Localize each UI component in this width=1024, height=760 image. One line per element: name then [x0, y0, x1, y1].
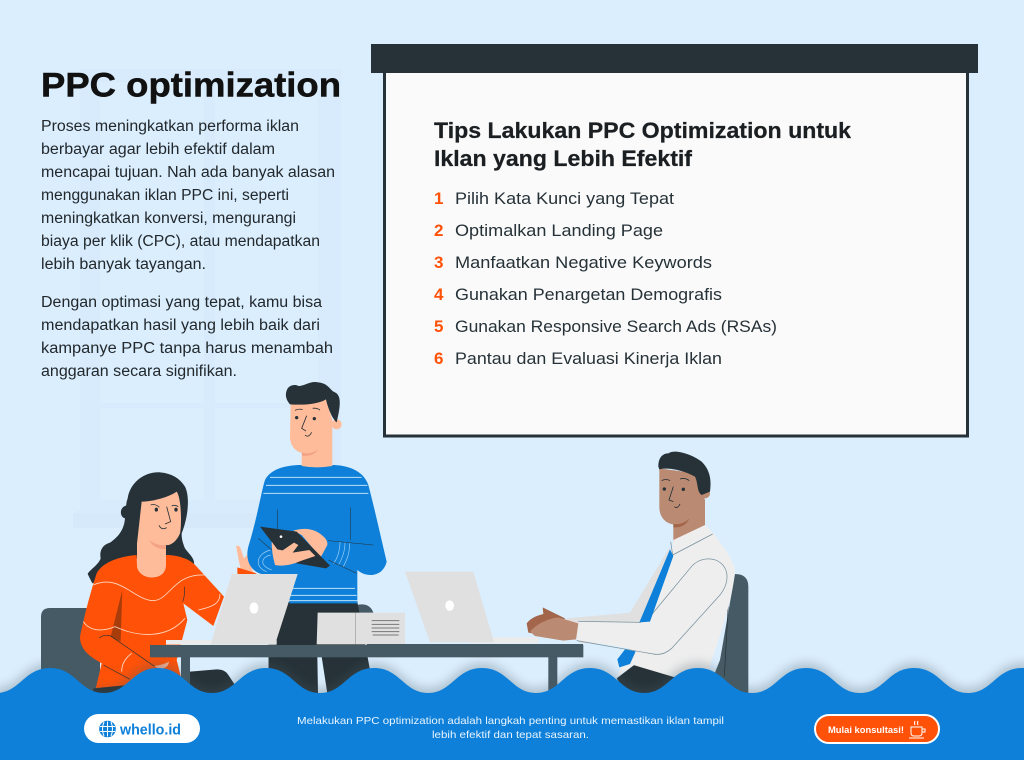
tip 4: Gunakan Penargetan Demografis — [455, 285, 722, 304]
head and neck — [290, 399, 332, 467]
woman hand on table — [154, 662, 169, 669]
intro paragraph: Proses meningkatkan performa iklan — [41, 118, 299, 135]
woman face and neck — [137, 492, 181, 577]
woman facial features — [151, 505, 178, 529]
logo text: whello.id — [119, 722, 181, 738]
second paragraph: Dengan optimasi yang tepat, kamu bisa — [41, 294, 322, 311]
tips heading: Tips Lakukan PPC Optimization untuk — [434, 118, 852, 143]
title: PPC optimization — [41, 66, 341, 104]
head and neck — [659, 468, 705, 542]
sleeve details — [258, 542, 349, 572]
intro paragraph: biaya per klik (CPC), atau mendapatkan — [41, 233, 320, 250]
second paragraph: mendapatkan hasil yang lebih baik dari — [41, 317, 320, 334]
tip 5: Gunakan Responsive Search Ads (RSAs) — [455, 317, 777, 336]
tip 5: 5 — [434, 317, 443, 336]
intro paragraph: meningkatkan konversi, mengurangi — [41, 210, 296, 227]
table leg — [548, 656, 557, 696]
icon: coffee cup — [909, 721, 925, 738]
footer wave band — [0, 668, 1024, 760]
woman trousers — [93, 669, 235, 698]
sweater stripes — [263, 477, 368, 601]
face features — [662, 478, 689, 508]
chair behind box — [350, 604, 374, 615]
hair — [88, 472, 194, 583]
consultation button — [815, 715, 939, 743]
screen sheet — [384, 70, 968, 436]
intro paragraph: lebih banyak tayangan. — [41, 256, 206, 273]
footer message: Melakukan PPC optimization adalah langkah penting untuk memastikan iklan tampil — [297, 715, 724, 727]
tablet — [260, 527, 330, 568]
panel: projector screen with tips — [371, 44, 978, 436]
tip 1: Pilih Kata Kunci yang Tepat — [455, 189, 674, 208]
illustration: seated man with laptop — [367, 452, 748, 696]
button label: Mulai konsultasi! — [828, 725, 904, 736]
icon: globe — [100, 722, 115, 736]
tip 6: 6 — [434, 349, 443, 368]
tip 2: Optimalkan Landing Page — [455, 221, 663, 240]
intro paragraph: menggunakan iklan PPC ini, seperti — [41, 187, 289, 204]
arm outline — [577, 534, 727, 654]
illustration: woman, standing man, laptop, table — [41, 382, 583, 700]
hair — [658, 452, 711, 495]
woman seated — [80, 472, 257, 698]
intro paragraph — [41, 118, 335, 273]
trousers — [617, 664, 680, 693]
trousers — [268, 602, 370, 698]
box on table — [317, 613, 405, 644]
hands — [527, 607, 565, 634]
laptop — [166, 574, 298, 645]
tip 4: 4 — [434, 285, 444, 304]
left chair — [41, 608, 100, 697]
right chair — [707, 574, 748, 693]
laptop — [405, 572, 538, 643]
second paragraph: kampanye PPC tanpa harus menambah — [41, 340, 333, 357]
ear — [700, 488, 710, 498]
left hand on tablet — [272, 542, 315, 566]
shirt — [577, 525, 735, 678]
tip 3: Manfaatkan Negative Keywords — [455, 253, 712, 272]
sweater lines — [83, 575, 220, 672]
table top — [150, 645, 583, 657]
tip 2: 2 — [434, 221, 443, 240]
sweater fold — [111, 590, 122, 642]
footer message — [297, 715, 724, 741]
man facial features — [295, 408, 320, 436]
man hair — [286, 382, 340, 422]
tips heading — [434, 118, 852, 171]
tie — [617, 549, 673, 667]
standing man — [247, 382, 387, 698]
logo pill — [84, 714, 200, 743]
wave shadow — [0, 663, 1024, 720]
screen top bar — [371, 44, 978, 73]
tips heading: Iklan yang Lebih Efektif — [434, 146, 693, 171]
tip 1: 1 — [434, 189, 443, 208]
window backdrop — [73, 69, 341, 528]
tip 3: 3 — [434, 253, 443, 272]
right hand — [293, 529, 327, 557]
hand behind laptop — [236, 545, 253, 573]
ear — [332, 419, 342, 429]
intro paragraph: mencapai tujuan. Nah ada banyak alasan — [41, 164, 335, 181]
table top — [367, 644, 583, 656]
table leg — [181, 657, 190, 700]
second paragraph — [41, 294, 333, 380]
sweater — [80, 555, 224, 692]
blue sweater — [247, 465, 387, 603]
intro paragraph: berbayar agar lebih efektif dalam — [41, 141, 275, 158]
tip 6: Pantau dan Evaluasi Kinerja Iklan — [455, 349, 722, 368]
footer message: lebih efektif dan tepat sasaran. — [432, 729, 589, 741]
shirt back — [567, 547, 670, 643]
second paragraph: anggaran secara signifikan. — [41, 363, 237, 380]
